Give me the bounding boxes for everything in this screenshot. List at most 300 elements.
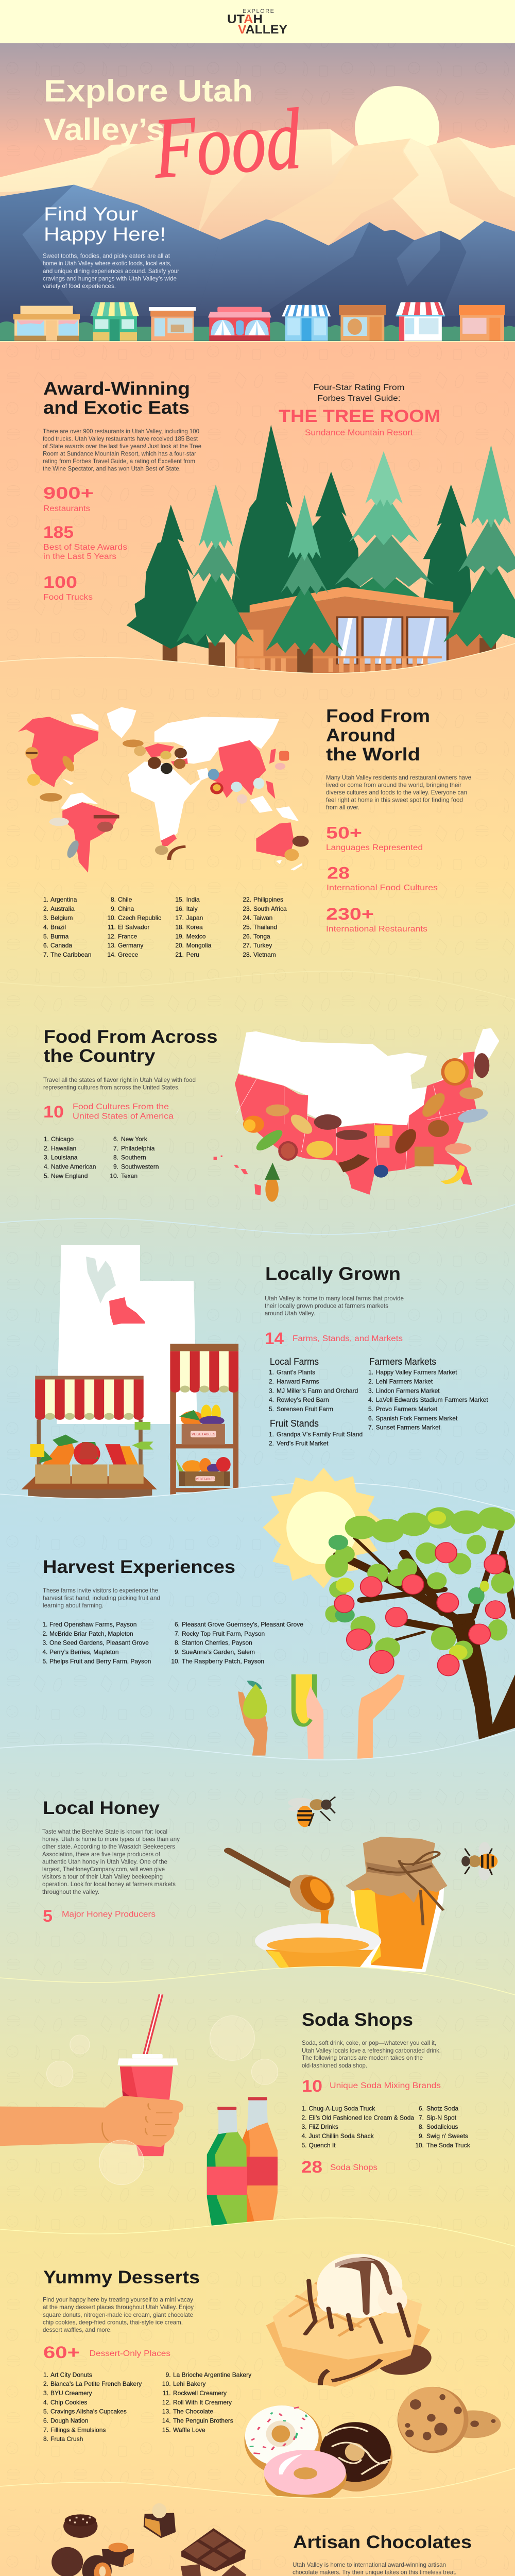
list of dessert places: 14.	[162, 2417, 171, 2425]
bee 2	[461, 1842, 497, 1880]
illustration: pine trees and cabin	[127, 425, 515, 674]
heading: Artisan Chocolates	[293, 2532, 472, 2552]
list of countries: 4.	[43, 923, 48, 930]
list of countries: Tonga	[253, 933, 270, 940]
list of dessert places: BYU Creamery	[50, 2389, 92, 2397]
list of harvest farms: SueAnne’s Garden, Salem	[182, 1649, 255, 1656]
list of countries: 5.	[43, 933, 48, 940]
body text: of State awards over the last five years! Just look at the Tree	[43, 443, 201, 450]
list: farmers markets: 1.	[368, 1369, 373, 1376]
list: local farms: 2.	[269, 1378, 274, 1385]
list of dessert places: 15.	[162, 2426, 171, 2433]
honey dipper	[228, 1851, 344, 1937]
list of dessert places: Art City Donuts	[50, 2371, 92, 2378]
list of countries: 18.	[175, 923, 184, 930]
iced donut with sprinkles	[245, 2405, 322, 2475]
list of countries: 14.	[107, 951, 116, 958]
list: farmers markets	[368, 1357, 488, 1431]
list of countries: Burma	[50, 933, 69, 940]
crate labels	[192, 1433, 215, 1481]
logo: Explore Utah Valley: UTAH	[227, 12, 263, 26]
list of US food cultures: 10.	[110, 1172, 118, 1179]
list of dessert places: 3.	[43, 2389, 48, 2397]
heading: Around	[326, 725, 396, 745]
list of soda brands: 6.	[419, 2105, 424, 2112]
list of countries: 23.	[243, 905, 251, 912]
list of harvest farms: 5.	[42, 1657, 47, 1665]
bubble over hand	[99, 2140, 144, 2185]
list of countries: 10.	[107, 914, 116, 922]
stat: 5 honey producers: Major Honey Producers	[62, 1910, 156, 1919]
storefront 2: produce	[90, 302, 139, 341]
list of US food cultures: Native American	[51, 1163, 96, 1171]
heading: the Country	[43, 1046, 156, 1066]
list of US food cultures: Philadelphia	[121, 1145, 155, 1152]
body text: the Wine Spectator, and has won Utah Best of State.	[43, 465, 181, 472]
world map	[18, 707, 309, 873]
body text: Many Utah Valley residents and restaurant owners have	[326, 774, 471, 781]
list: farmers markets: Lindon Farmers Market	[376, 1387, 440, 1394]
list of countries: The Caribbean	[50, 951, 91, 958]
list of US food cultures: 6.	[113, 1136, 118, 1143]
list of US food cultures: Louisiana	[51, 1154, 78, 1161]
list of soda brands: 5.	[301, 2142, 307, 2149]
heading	[43, 1027, 217, 1066]
stat: 28 soda shops: 28	[301, 2158, 322, 2176]
open hand	[357, 1674, 405, 1759]
list of dessert places: Roll With It Creamery	[173, 2399, 232, 2406]
list of countries: Taiwan	[253, 914, 272, 922]
stat: 185 best of state awards: in the Last 5 Years	[43, 552, 116, 561]
panel: food from around the world	[18, 706, 471, 958]
body text: square donuts, nitrogen-made ice cream, giant chocolate	[43, 2311, 193, 2318]
chocolate donut	[320, 2422, 392, 2492]
wave divider 3	[0, 1205, 515, 1234]
US map	[214, 1028, 499, 1202]
stat: 5 honey producers	[43, 1907, 156, 1925]
list of dessert places: 11.	[163, 2389, 171, 2397]
honey bowl	[255, 1923, 382, 1968]
illustration: hero mountains and storefronts	[0, 129, 515, 342]
list of countries: 11.	[108, 923, 116, 930]
storefront 8: butcher	[459, 305, 505, 341]
list of dessert places: The Chocolate	[173, 2408, 213, 2415]
list: farmers markets: LaVell Edwards Stadium Farmers Market	[376, 1396, 488, 1403]
list of countries: Chile	[118, 896, 132, 903]
stat: 10 food cultures: Food Cultures From the	[73, 1103, 169, 1111]
stat: 28 food cultures: 28	[327, 863, 350, 882]
list: farmers markets: Farmers Markets	[369, 1357, 436, 1367]
left stall	[21, 1376, 157, 1499]
body text: largest, TheHoneyCompany.com, will even give	[42, 1866, 165, 1873]
body text: operation. Look for local honey at farmers markets	[42, 1880, 176, 1888]
wave divider 6	[0, 1967, 515, 1999]
stat: 100 food trucks: Food Trucks	[43, 593, 93, 602]
list of harvest farms: Fred Openshaw Farms, Payson	[49, 1621, 136, 1628]
list of soda brands: 8.	[419, 2123, 424, 2130]
panel: food from across the country	[43, 1027, 499, 1202]
storefront 3: bakery	[149, 307, 196, 341]
list of harvest farms: 6.	[175, 1621, 180, 1628]
list of US food cultures: 9.	[113, 1163, 118, 1171]
tree room callout: Forbes Travel Guide:	[317, 394, 401, 403]
crate labels: VEGETABLES	[196, 1478, 214, 1481]
list of US food cultures: 4.	[44, 1163, 49, 1171]
food icons on US map	[243, 1053, 491, 1202]
stat: 185 best of state awards	[43, 523, 127, 561]
list: local farms: 5.	[269, 1405, 274, 1413]
stat: 230+ restaurants: 230+	[326, 905, 374, 923]
body text: their locally grown produce at farmers markets	[265, 1302, 388, 1310]
list of US food cultures: 1.	[44, 1136, 49, 1143]
storefront 4: restaurant	[208, 307, 271, 341]
body text	[302, 2039, 441, 2069]
list of countries: 17.	[175, 914, 184, 922]
highlighted countries in red	[18, 717, 294, 873]
list of harvest farms: 8.	[175, 1639, 180, 1647]
list of harvest farms: One Seed Gardens, Pleasant Grove	[49, 1639, 149, 1647]
stat: 5 honey producers: 5	[43, 1907, 53, 1925]
body text: There are over 900 restaurants in Utah Valley, including 100	[43, 428, 199, 435]
list of soda brands: Sip-N Spot	[426, 2114, 457, 2121]
list of harvest farms: Phelps Fruit and Berry Farm, Payson	[49, 1657, 151, 1665]
crate labels: VEGETABLES	[192, 1433, 215, 1436]
list: local farms: 3.	[269, 1387, 274, 1394]
list of countries: Australia	[50, 905, 75, 912]
panel: yummy desserts	[43, 2254, 501, 2503]
list of soda brands: Sodalicious	[426, 2123, 458, 2130]
icon: sun	[263, 1468, 384, 1588]
logo: Explore Utah Valley: VALLEY	[238, 23, 287, 37]
stat: 10 soda brands	[302, 2077, 441, 2095]
body text: authentic Utah honey in Utah Valley. One of the	[42, 1858, 167, 1865]
list: fruit stands: 2.	[269, 1440, 274, 1447]
list of US food cultures: Hawaiian	[51, 1145, 76, 1152]
body text	[42, 1828, 180, 1895]
list of dessert places: 2.	[43, 2380, 48, 2387]
list: fruit stands	[269, 1418, 363, 1447]
stat: 100 food trucks	[43, 573, 93, 602]
wave divider 7	[0, 2218, 515, 2251]
illustration: waffle with ice cream	[266, 2254, 438, 2387]
list of dessert places: 12.	[162, 2399, 171, 2406]
wave divider 2	[0, 971, 515, 999]
straw	[145, 1994, 161, 2055]
list of US food cultures: 5.	[44, 1172, 49, 1179]
tree room callout: Four-Star Rating From	[313, 383, 405, 392]
list of countries: 26.	[243, 933, 251, 940]
list: farmers markets: Lehi Farmers Market	[376, 1378, 433, 1385]
list of dessert places: 1.	[43, 2371, 48, 2378]
list of countries: 2.	[43, 905, 48, 912]
list: farmers markets: Spanish Fork Farmers Market	[376, 1415, 458, 1422]
panel: soda shops	[0, 1994, 471, 2227]
body text: Travel all the states of flavor right in Utah Valley with food	[43, 1076, 196, 1083]
list of dessert places: 13.	[162, 2408, 171, 2415]
list of soda brands: 7.	[419, 2114, 424, 2121]
hero subtitle	[44, 204, 166, 245]
list of countries: Belgium	[50, 914, 73, 922]
list of soda brands: 4.	[301, 2132, 307, 2140]
stat: 230+ restaurants	[326, 905, 427, 934]
list of US food cultures: Southern	[121, 1154, 146, 1161]
list of US food cultures: Texan	[121, 1172, 138, 1179]
body text: feel right at home in this sweet spot for finding food	[326, 796, 463, 804]
body text	[293, 2561, 456, 2576]
illustration: honey jar, bowl, dipper and bees	[228, 1797, 497, 1972]
list of countries: 20.	[175, 942, 184, 949]
stat: 50+ languages: Languages Represented	[326, 843, 423, 852]
panel: locally grown	[21, 1245, 488, 1499]
stat: 28 soda shops	[301, 2158, 377, 2176]
body text	[43, 428, 201, 472]
list of dessert places: 6.	[43, 2417, 48, 2425]
body text: other state. According to the Wasatch Beekeepers	[42, 1843, 175, 1850]
illustration: chocolates	[52, 2503, 246, 2576]
hero title: Explore Utah	[44, 74, 253, 108]
icon: rising sun	[355, 86, 439, 171]
list of countries: Turkey	[253, 942, 272, 949]
list of countries: Vietnam	[253, 951, 276, 958]
list of dessert places: 7.	[43, 2426, 48, 2433]
header band with logo	[0, 0, 515, 43]
body text: Utah Valley is home to international award-winning artisan	[293, 2561, 446, 2568]
list of countries: South Africa	[253, 905, 287, 912]
list: local farms: 4.	[269, 1396, 274, 1403]
body text: Utah Valley is home to many local farms that provide	[265, 1295, 404, 1302]
body text: around Utah Valley.	[265, 1310, 315, 1317]
panel: local honey	[42, 1797, 497, 1972]
stat: 28 food cultures	[327, 863, 438, 892]
wave divider 8	[0, 2468, 515, 2509]
list: farmers markets: 5.	[368, 1405, 373, 1413]
stat: 14 farms: Farms, Stands, and Markets	[293, 1334, 403, 1343]
list of dessert places	[43, 2371, 251, 2443]
list of countries: Canada	[50, 942, 72, 949]
body text: diverse cultures and foods to the valley. Everyone can	[326, 789, 467, 796]
stat: 14 farms	[265, 1329, 403, 1348]
list of countries: 8.	[111, 896, 116, 903]
stat: 185 best of state awards: 185	[43, 523, 74, 541]
body text: rating from Forbes Travel Guide, a rating of Excellent from	[43, 457, 195, 465]
bubbles	[47, 2015, 278, 2087]
list of dessert places: Dough Nation	[50, 2417, 88, 2425]
heading	[43, 379, 190, 418]
list: farmers markets: Provo Farmers Market	[376, 1405, 438, 1413]
list of countries: 15.	[175, 896, 184, 903]
list: local farms: Sorensen Fruit Farm	[277, 1405, 333, 1413]
list of countries: 9.	[111, 905, 116, 912]
list of harvest farms: 10.	[171, 1657, 180, 1665]
list: farmers markets: 3.	[368, 1387, 373, 1394]
bee 1	[288, 1797, 335, 1827]
tree room callout: Sundance Mountain Resort	[305, 428, 413, 437]
list: local farms: MJ Miller’s Farm and Orchard	[277, 1387, 358, 1394]
wave divider 4	[0, 1483, 515, 1517]
hero intro paragraph: cravings and hunger pangs with Utah Valley’s wide	[43, 275, 177, 282]
body text	[43, 2296, 194, 2333]
heading: Yummy Desserts	[43, 2267, 200, 2287]
heading: the World	[326, 744, 420, 765]
hero title: Valley’s	[44, 112, 165, 147]
hero title	[44, 74, 253, 147]
heading: Soda Shops	[302, 2010, 413, 2030]
body text: learning about farming.	[43, 1602, 104, 1609]
list of soda brands: 3.	[301, 2123, 307, 2130]
stat: 100 food trucks: 100	[43, 573, 77, 591]
list of soda brands	[301, 2105, 471, 2149]
body text	[326, 774, 471, 811]
list of soda brands: Eli’s Old Fashioned Ice Cream & Soda	[309, 2114, 414, 2121]
stat: 60+ dessert places: 60+	[43, 2343, 80, 2362]
list of dessert places: 10.	[162, 2380, 171, 2387]
heading: Food From Across	[43, 1027, 217, 1047]
list: local farms: Local Farms	[270, 1357, 319, 1367]
list of countries: Mongolia	[186, 942, 212, 949]
body text: lived or come from around the world, bringing their	[326, 782, 461, 789]
list of countries: Argentina	[50, 896, 77, 903]
list of US food cultures: Chicago	[51, 1136, 74, 1143]
list: farmers markets: 2.	[368, 1378, 373, 1385]
hero intro paragraph: variety of food experiences.	[43, 282, 116, 290]
list of dessert places: Fillings & Emulsions	[50, 2426, 106, 2433]
list of countries: 1.	[43, 896, 48, 903]
body text: representing cultures from across the United States.	[43, 1084, 180, 1091]
list of countries: 6.	[43, 942, 48, 949]
body text: Taste what the Beehive State is known for: local	[42, 1828, 167, 1835]
list of countries: 16.	[175, 905, 184, 912]
body text: harvest first hand, including picking fruit and	[43, 1594, 160, 1601]
orange bottle	[242, 2097, 278, 2225]
list of countries: Mexico	[186, 933, 206, 940]
list of soda brands: 2.	[301, 2114, 307, 2121]
list of soda brands: Chug-A-Lug Soda Truck	[309, 2105, 375, 2112]
list of soda brands: Quench It	[309, 2142, 336, 2149]
stat: 10 soda brands: 10	[302, 2077, 322, 2095]
stat: 900+ restaurants: Restaurants	[43, 504, 90, 513]
tree room callout: THE TREE ROOM	[279, 406, 440, 426]
list of US food cultures: 7.	[113, 1145, 118, 1152]
list of countries: 22.	[243, 896, 251, 903]
list of countries: El Salvador	[118, 923, 149, 930]
list of dessert places: The Penguin Brothers	[173, 2417, 233, 2425]
list of US food cultures: 2.	[44, 1145, 49, 1152]
body text: at the many dessert places throughout Utah Valley. Enjoy	[43, 2303, 194, 2311]
body text: food trucks. Utah Valley restaurants have received 185 Best	[43, 435, 198, 443]
hand with corn	[291, 1674, 323, 1759]
list of countries: Peru	[186, 951, 199, 958]
storefront 5: blue awning shop	[282, 305, 331, 341]
body text	[43, 1587, 160, 1609]
list of harvest farms: Stanton Cherries, Payson	[182, 1639, 252, 1647]
list of US food cultures: Southwestern	[121, 1163, 159, 1171]
stat: 28 food cultures: International Food Cultures	[327, 884, 438, 892]
list of countries: Japan	[186, 914, 203, 922]
list of harvest farms: 7.	[175, 1630, 180, 1637]
list of dessert places: 4.	[43, 2399, 48, 2406]
body text	[43, 1076, 196, 1091]
list of countries: China	[118, 905, 134, 912]
list of countries: Brazil	[50, 923, 66, 930]
body text: The following brands are modern takes on the	[302, 2054, 423, 2061]
list: fruit stands: Fruit Stands	[270, 1418, 319, 1429]
list of countries: 3.	[43, 914, 48, 922]
list of countries: 7.	[43, 951, 48, 958]
honey jar	[346, 1837, 448, 1972]
hero intro paragraph: Sweet tooths, foodies, and picky eaters are all at	[43, 252, 170, 259]
body text: from all over.	[326, 804, 359, 811]
body text: chip cookies, deep-fried cronuts, thai-style ice cream,	[43, 2318, 183, 2326]
list of dessert places: 5.	[43, 2408, 48, 2415]
stat: 60+ dessert places	[43, 2343, 170, 2362]
body text: visitors a tour of their Utah Valley beekeeping	[42, 1873, 163, 1880]
list of countries: Italy	[186, 905, 198, 912]
heading: and Exotic Eats	[43, 398, 190, 418]
list of countries: 27.	[243, 942, 251, 949]
ground strip	[0, 327, 515, 341]
right shelf stall	[170, 1344, 238, 1497]
list of dessert places: Cravings Alisha’s Cupcakes	[50, 2408, 127, 2415]
list of harvest farms: 2.	[42, 1630, 47, 1637]
hero script word Food: Food	[150, 91, 304, 197]
body text: chocolate makers. Try their unique takes on this timeless treat.	[293, 2569, 456, 2576]
list of soda brands: Shotz Soda	[426, 2105, 458, 2112]
list of countries: France	[118, 933, 138, 940]
list of US food cultures: 8.	[113, 1154, 118, 1161]
list of harvest farms: Perry’s Berries, Mapleton	[49, 1649, 118, 1656]
list of countries: Philippines	[253, 896, 283, 903]
logo: Explore Utah Valley: EXPLORE	[243, 8, 274, 14]
list of dessert places: 8.	[43, 2435, 48, 2443]
hand with pear	[238, 1681, 268, 1756]
stat: 50+ languages: 50+	[326, 823, 362, 842]
stat: 10 soda brands: Unique Soda Mixing Brands	[330, 2081, 441, 2090]
list: fruit stands: Grandpa V’s Family Fruit Stand	[277, 1431, 363, 1438]
list of countries: 12.	[107, 933, 116, 940]
hero subtitle: Happy Here!	[44, 224, 166, 245]
panel: artisan chocolates	[21, 2503, 472, 2576]
stat: 10 food cultures: 10	[43, 1103, 64, 1121]
body text: These farms invite visitors to experience the	[43, 1587, 158, 1594]
list: fruit stands: 1.	[269, 1431, 274, 1438]
list: local farms: Harward Farms	[277, 1378, 319, 1385]
list of countries: India	[186, 896, 200, 903]
hero intro paragraph: home in Utah Valley where exotic foods, local eats,	[43, 260, 171, 267]
Utah state map	[57, 1245, 197, 1424]
list: fruit stands: Verd’s Fruit Market	[277, 1440, 329, 1447]
list of countries	[43, 896, 287, 958]
green bottle	[207, 2107, 247, 2227]
stat: 900+ restaurants: 900+	[43, 484, 94, 502]
body text: dessert waffles, and more.	[43, 2326, 112, 2333]
hero subtitle: Find Your	[44, 204, 138, 225]
continents in white	[61, 707, 302, 871]
list of countries: Korea	[186, 923, 203, 930]
list of dessert places: Fruta Crush	[50, 2435, 83, 2443]
hand holding cup	[0, 2096, 183, 2147]
illustration: apple tree	[325, 1507, 515, 1739]
list: local farms: 1.	[269, 1369, 274, 1376]
stat: 10 food cultures	[43, 1103, 174, 1121]
heading: Award-Winning	[43, 379, 190, 399]
body text: Find your happy here by treating yourself to a mini vacay	[43, 2296, 193, 2303]
body text: Utah Valley locals love a refreshing carbonated drink.	[302, 2047, 441, 2054]
list of countries: Czech Republic	[118, 914, 161, 922]
body text: Room at Sundance Mountain Resort, which has a four-star	[43, 450, 196, 457]
list of harvest farms: 1.	[42, 1621, 47, 1628]
list: local farms	[269, 1357, 358, 1413]
tree room callout	[279, 383, 440, 437]
